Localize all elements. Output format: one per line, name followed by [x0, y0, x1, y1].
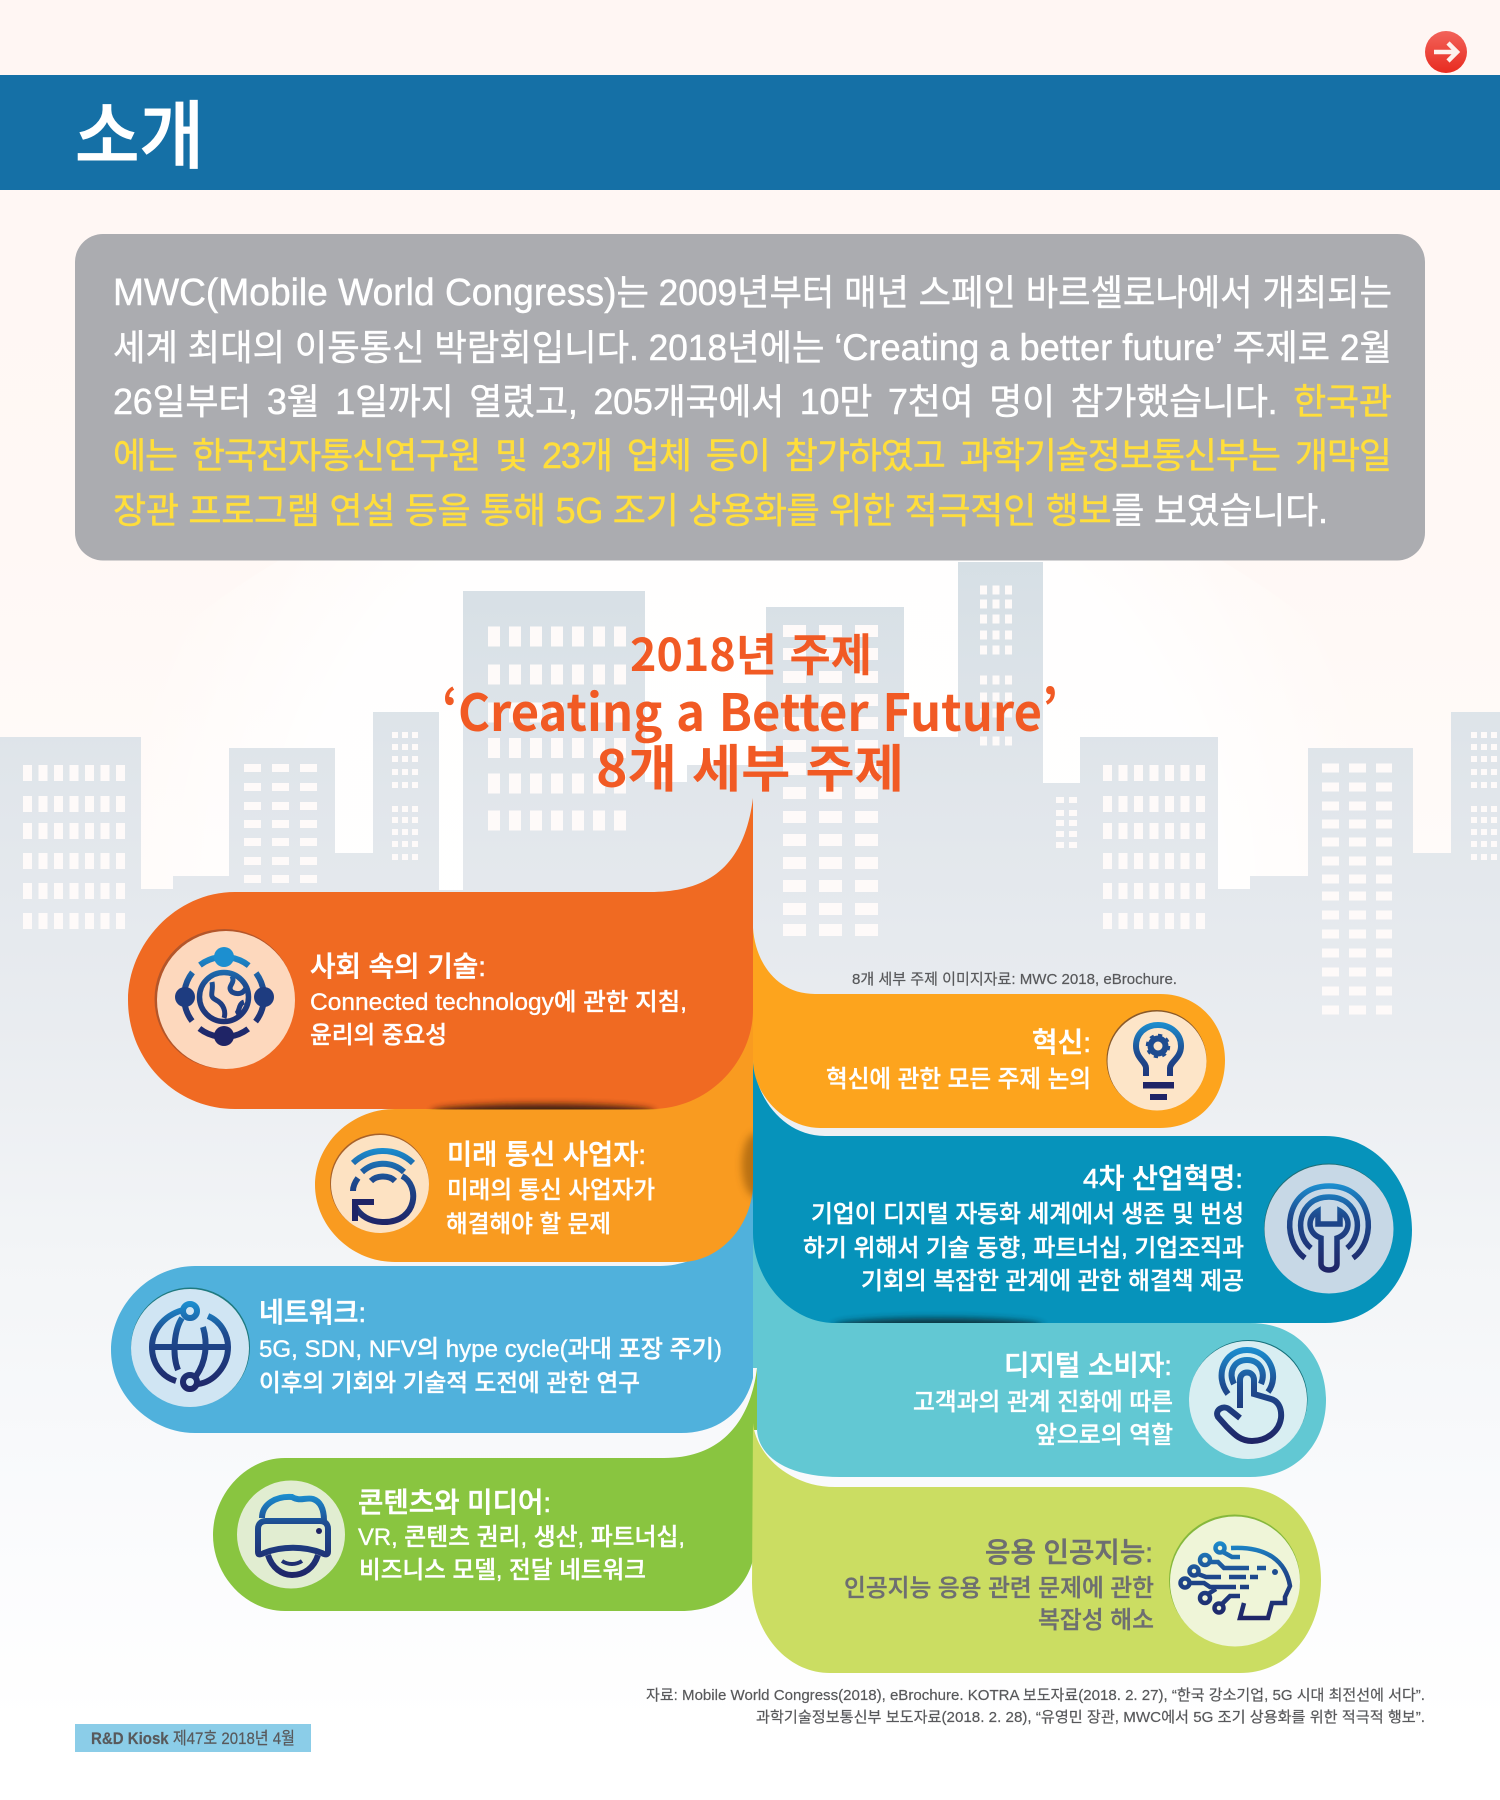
icon: wrench with waves: [1264, 1164, 1394, 1294]
item: content and media: [237, 1480, 685, 1588]
intro text panel: [75, 234, 1425, 560]
panel: fourth industrial revolution (teal): [753, 1060, 1412, 1323]
panel: innovation (amber): [753, 928, 1225, 1128]
heading: 2018 theme: ‘Creating a Better Future’: [442, 672, 1058, 746]
footer badge: R&D Kiosk 제47호 2018년 4월: [91, 1729, 295, 1748]
panel: digital consumer (cyan): [753, 1180, 1326, 1477]
panel: content and media (green): [213, 1368, 757, 1611]
title: 혁신:: [1032, 1027, 1091, 1058]
item: technology in society: [154, 929, 687, 1069]
shadow on telecom panel: [738, 1130, 753, 1200]
intro text panel: 장관 프로그램 연설 등을 통해 5G 조기 상용화를 위한 적극적인 행보를 보였습니다.: [113, 490, 1328, 531]
panel: future telecom (orange): [315, 900, 753, 1262]
panel: network (light blue): [111, 1170, 753, 1433]
footer badge: [75, 1724, 311, 1752]
icon: light bulb with gear: [1106, 1010, 1206, 1110]
heading: 2018 theme: 8개 세부 주제: [596, 728, 904, 802]
heading: 2018 theme: [442, 619, 1058, 802]
item: network: [131, 1288, 722, 1407]
item: innovation: [826, 1010, 1206, 1110]
description: 5G, SDN, NFV의 hype cycle(과대 포장 주기): [259, 1336, 722, 1363]
title: 미래 통신 사업자:: [447, 1139, 646, 1170]
panel: applied AI (lime): [752, 1423, 1321, 1673]
icon: AI head with circuits: [1169, 1514, 1300, 1646]
header band: 소개: [75, 77, 204, 184]
icon: VR headset: [237, 1480, 345, 1588]
source notes: 자료: Mobile World Congress(2018), eBrochure. KOTRA 보도자료(2018. 2. 27), “한국 강소기업, 5G 시대 최전선에 서다”.: [646, 1687, 1425, 1704]
item: fourth industrial revolution: [803, 1163, 1394, 1295]
item: digital consumer: 앞으로의 역할: [1035, 1422, 1173, 1449]
item: content and media: 비즈니스 모델, 전달 네트워크: [359, 1557, 646, 1584]
description: VR, 콘텐츠 권리, 생산, 파트너십,: [358, 1524, 685, 1551]
item: future telecom: [330, 1134, 655, 1238]
description: 혁신에 관한 모든 주제 논의: [826, 1066, 1091, 1093]
shadow under teal panel: [830, 1312, 1046, 1323]
image credit note: 8개 세부 주제 이미지자료: MWC 2018, eBrochure.: [852, 971, 1177, 988]
item: applied AI: 복잡성 해소: [1038, 1607, 1154, 1634]
heading: 2018 theme: 2018년 주제: [630, 619, 872, 684]
title: 응용 인공지능:: [985, 1537, 1153, 1568]
description: 고객과의 관계 진화에 따른: [913, 1389, 1173, 1416]
header band: [0, 75, 1500, 190]
title: 디지털 소비자:: [1004, 1350, 1172, 1381]
icon: wifi with refresh: [330, 1134, 429, 1233]
shadow under society panel: [428, 1098, 658, 1110]
description: 기업이 디지털 자동화 세계에서 생존 및 번성: [811, 1201, 1244, 1228]
item: technology in society: 윤리의 중요성: [310, 1022, 447, 1049]
item: digital consumer: [913, 1340, 1308, 1459]
item: applied AI: [844, 1514, 1300, 1646]
description: 미래의 통신 사업자가: [447, 1177, 655, 1204]
title: 콘텐츠와 미디어:: [358, 1487, 551, 1518]
title: 4차 산업혁명:: [1083, 1163, 1243, 1194]
intro text panel: 26일부터 3월 1일까지 열렸고, 205개국에서 10만 7천여 명이 참가했습니다. 한국관: [113, 381, 1392, 422]
item: network: 이후의 기회와 기술적 도전에 관한 연구: [259, 1370, 640, 1397]
description: Connected technology에 관한 지침,: [310, 989, 687, 1016]
title: 사회 속의 기술:: [310, 951, 486, 982]
icon: touch finger: [1189, 1340, 1308, 1459]
arrow button: [1425, 31, 1467, 73]
intro text panel: MWC(Mobile World Congress)는 2009년부터 매년 스페인 바르셀로나에서 개최되는: [113, 272, 1392, 314]
description: 인공지능 응용 관련 문제에 관한: [844, 1575, 1154, 1602]
city skyline background: [0, 562, 1500, 1720]
item: future telecom: 해결해야 할 문제: [446, 1211, 611, 1238]
source notes: [646, 1687, 1425, 1726]
background glow: [0, 440, 1500, 1560]
intro text panel: 세계 최대의 이동통신 박람회입니다. 2018년에는 ‘Creating a better future’ 주제로 2월: [113, 327, 1392, 368]
item: fourth industrial revolution: 하기 위해서 기술 동향, 파트너십, 기업조직과: [803, 1235, 1244, 1262]
icon: globe with nodes: [131, 1288, 250, 1407]
source notes: 과학기술정보통신부 보도자료(2018. 2. 28), “유영민 장관, MWC에서 5G 조기 상용화를 위한 적극적 행보”.: [756, 1709, 1425, 1726]
panel: technology in society (dark orange): [128, 798, 753, 1109]
intro text panel: 에는 한국전자통신연구원 및 23개 업체 등이 참가하였고 과학기술정보통신부는 개막일: [113, 435, 1392, 476]
item: fourth industrial revolution: 기회의 복잡한 관계에 관한 해결책 제공: [861, 1268, 1244, 1295]
title: 네트워크:: [259, 1297, 366, 1328]
icon: globe with people: [154, 929, 295, 1069]
